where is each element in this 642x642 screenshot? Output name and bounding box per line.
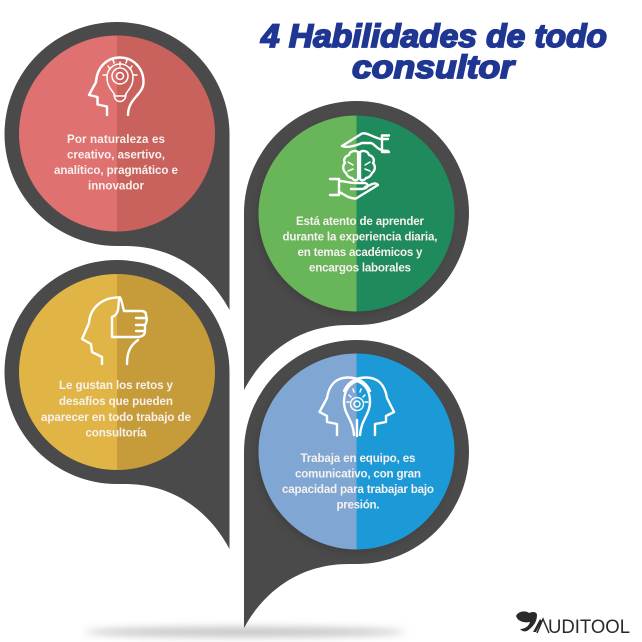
icon: two heads with gear — [320, 378, 394, 436]
red text: analítico, pragmático e — [54, 164, 179, 177]
ground shadow — [85, 627, 405, 637]
red text — [54, 133, 179, 192]
title: 4 Habilidades de todo — [260, 18, 607, 54]
panel: challenges yellow — [5, 260, 229, 549]
red text: creativo, asertivo, — [67, 148, 165, 162]
yellow text: aparecer en todo trabajo de — [41, 411, 192, 424]
red text: Por naturaleza es — [67, 133, 165, 146]
icon: logo mark — [516, 611, 542, 632]
red teardrop background — [5, 22, 229, 310]
green circle — [256, 116, 454, 315]
green text: en temas académicos y — [298, 246, 423, 259]
panel: learning green — [244, 101, 469, 390]
blue text: presión. — [336, 498, 380, 512]
green text: Está atento de aprender — [296, 215, 424, 228]
yellow text: desafíos que pueden — [59, 395, 173, 408]
green text — [282, 215, 438, 274]
blue teardrop background — [244, 340, 469, 628]
green teardrop background — [244, 101, 469, 390]
blue text: Trabaja en equipo, es — [300, 452, 416, 465]
green text: encargos laborales — [309, 262, 411, 274]
icon: head with light bulb — [89, 58, 144, 115]
yellow text: consultoría — [86, 426, 147, 440]
red text: innovador — [88, 180, 144, 192]
blue text: comunicativo, con gran — [295, 468, 421, 480]
yellow teardrop background — [5, 260, 229, 549]
panel: creative red — [5, 22, 229, 310]
blue text: capacidad para trabajar bajo — [282, 483, 434, 496]
blue text — [282, 452, 434, 512]
red circle — [19, 36, 215, 232]
logo wordmark: UDITOOL — [548, 617, 630, 638]
blue circle — [256, 354, 454, 553]
title: consultor — [352, 49, 516, 85]
panel: teamwork blue — [244, 340, 469, 628]
yellow circle — [19, 274, 215, 470]
yellow text: Le gustan los retos y — [59, 379, 174, 392]
logo: Auditool — [516, 611, 630, 638]
icon: head with thumb up — [82, 297, 147, 364]
green text: durante la experiencia diaria, — [282, 230, 438, 244]
yellow text — [41, 379, 192, 440]
title — [260, 18, 607, 85]
icon: hands holding brain — [330, 133, 389, 199]
